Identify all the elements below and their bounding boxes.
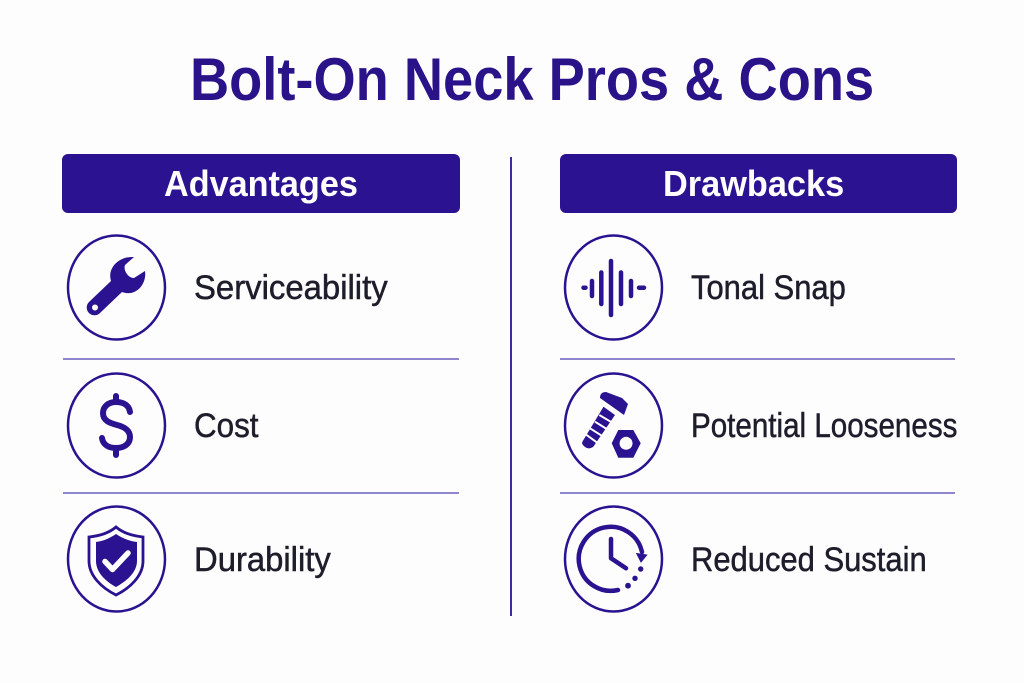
heading: advantages: Advantages bbox=[164, 163, 358, 204]
icon: shield bbox=[66, 505, 166, 613]
heading: drawbacks bbox=[560, 154, 957, 213]
label: cost: Cost bbox=[194, 407, 258, 445]
icon: bolt and nut bbox=[564, 372, 664, 479]
label: reduced sustain: Reduced Sustain bbox=[691, 541, 927, 579]
panel: drawbacks bbox=[560, 154, 957, 613]
icon: clock bbox=[564, 505, 664, 613]
label: serviceability: Serviceability bbox=[194, 269, 388, 307]
panel: advantages bbox=[62, 154, 460, 613]
icon: sound wave bbox=[564, 234, 664, 341]
title: Bolt-On Neck Pros & Cons bbox=[190, 46, 874, 113]
icon: dollar bbox=[66, 372, 166, 479]
center divider bbox=[510, 157, 512, 616]
heading: drawbacks: Drawbacks bbox=[663, 163, 844, 204]
label: durability: Durability bbox=[194, 541, 331, 579]
label: potential looseness: Potential Looseness bbox=[691, 407, 957, 445]
label: tonal snap: Tonal Snap bbox=[691, 269, 846, 307]
heading: advantages bbox=[62, 154, 460, 213]
icon: wrench bbox=[66, 234, 166, 341]
